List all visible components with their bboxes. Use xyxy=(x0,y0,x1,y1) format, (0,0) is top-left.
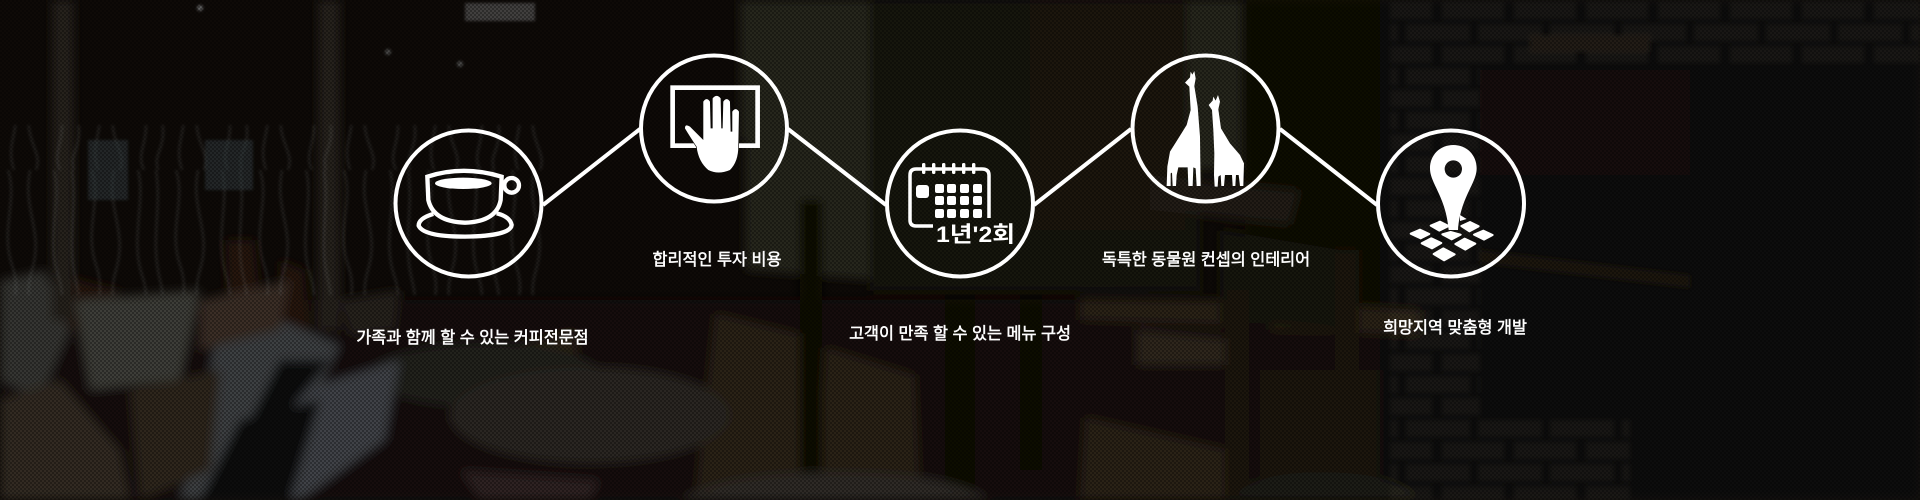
label: step 3: 고객이 만족 할 수 있는 메뉴 구성 xyxy=(849,325,1071,343)
connector: calendar to giraffes xyxy=(1034,129,1131,205)
connector: cup to hand xyxy=(543,129,640,205)
icon: calendar xyxy=(910,163,989,226)
step 1: coffee cup xyxy=(396,130,542,276)
step 3: menu calendar xyxy=(887,130,1033,276)
step 5: location pin xyxy=(1378,130,1524,276)
icon: hand on tablet xyxy=(673,88,758,172)
icon: coffee cup xyxy=(419,171,519,237)
circle xyxy=(887,130,1033,276)
circle xyxy=(1378,130,1524,276)
label: step 5: 희망지역 맞춤형 개발 xyxy=(1383,319,1527,337)
icon text: twice a year: 1년'2회 xyxy=(936,222,1015,247)
circle xyxy=(1132,56,1278,202)
icon: two giraffes xyxy=(1167,71,1244,187)
label: step 2: 합리적인 투자 비용 xyxy=(653,251,781,269)
connector: hand to calendar xyxy=(788,129,886,205)
circle xyxy=(641,56,787,202)
connector: giraffes to map pin xyxy=(1280,129,1377,205)
label: step 4: 독특한 동물원 컨셉의 인테리어 xyxy=(1102,251,1310,269)
step 2: investment hand xyxy=(641,56,787,202)
icon: map pin on grid xyxy=(1411,145,1493,260)
circle xyxy=(396,130,542,276)
label: step 1: 가족과 함께 할 수 있는 커피전문점 xyxy=(356,329,589,347)
step 4: giraffes xyxy=(1132,56,1278,202)
